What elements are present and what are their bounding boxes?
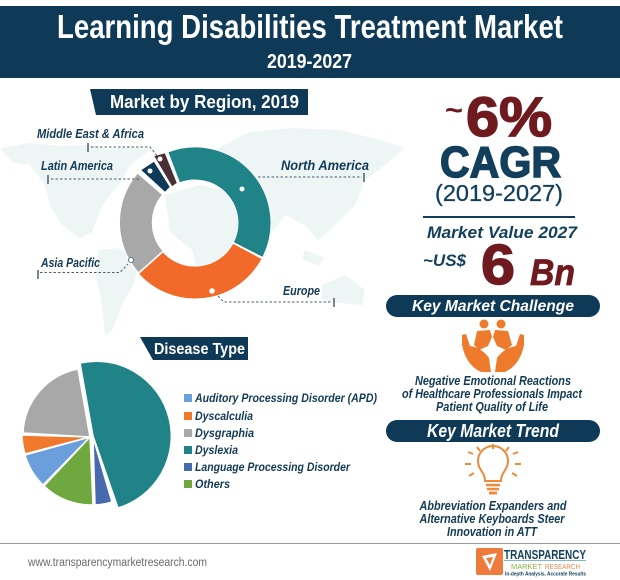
- segment: North America: [168, 147, 271, 258]
- label: North America: [240, 157, 369, 192]
- label: Middle East & Africa: [37, 127, 162, 162]
- segment: Latin America: [141, 162, 170, 192]
- footer url: www.transparencymarketresearch.com: [27, 557, 207, 569]
- header banner: [0, 6, 620, 78]
- slice: Language Processing Disorder: [93, 437, 112, 505]
- donut chart: market by region: [119, 147, 271, 299]
- stat: CAGR: [435, 85, 563, 206]
- stat: CAGR: 6%: [466, 85, 552, 148]
- pill: key market challenge: Key Market Challenge: [412, 298, 574, 315]
- background world map: [0, 128, 405, 335]
- text: challenge description: Patient Quality of Life: [436, 399, 548, 414]
- slice: Dyscalculia: [22, 435, 90, 454]
- text: trend description: Abbreviation Expanders and: [419, 498, 567, 513]
- text: trend description: Innovation in ATT: [447, 524, 538, 539]
- label: Middle East & Africa: Middle East & Africa: [37, 127, 144, 141]
- heading: disease type: [140, 337, 248, 360]
- label: Latin America: Latin America: [41, 159, 113, 173]
- heading: market by region: Market by Region, 2019: [110, 92, 299, 112]
- logo: Transparency Market Research: [476, 547, 586, 578]
- stat: market value: 6: [481, 233, 515, 297]
- legend: disease type: Auditory Processing Disorder (APD): [194, 391, 377, 405]
- subtitle years: 2019-2027: [267, 51, 352, 73]
- stat: CAGR: CAGR: [440, 138, 561, 187]
- logo: Transparency Market Research: TRANSPARENCY: [504, 547, 586, 562]
- label: Asia Pacific: [38, 256, 134, 279]
- logo: Transparency Market Research: In-depth Analysis, Accurate Results: [505, 572, 586, 578]
- heading: disease type: Disease Type: [154, 341, 245, 358]
- heading: market by region: [90, 89, 308, 115]
- stat: market value: [423, 224, 578, 297]
- icon: hands holding people: [462, 320, 524, 372]
- stat: market value: Market Value 2027: [427, 224, 578, 242]
- label: Asia Pacific: Asia Pacific: [40, 256, 100, 270]
- segment: Asia Pacific: [119, 173, 163, 273]
- logo: Transparency Market Research: RESEARCH: [545, 564, 580, 571]
- slice: Auditory Processing Disorder: [25, 437, 90, 485]
- divider: [423, 216, 575, 218]
- pill: key market challenge: [386, 295, 600, 317]
- text: trend description: [419, 498, 567, 539]
- legend: disease type: Dysgraphia: [195, 426, 254, 440]
- text: trend description: Alternative Keyboards Steer: [419, 511, 565, 526]
- icon: light bulb: [465, 444, 521, 493]
- legend: disease type: Others: [195, 477, 230, 491]
- pill: key market trend: Key Market Trend: [427, 421, 560, 441]
- legend: disease type: Language Processing Disorder: [195, 460, 351, 474]
- pill: key market trend: [386, 420, 600, 442]
- legend: disease type: [184, 391, 377, 491]
- label: Europe: [209, 284, 334, 307]
- slice: Others: [44, 437, 93, 505]
- stat: CAGR: ~: [445, 94, 463, 127]
- slice: Dyslexia: [80, 361, 171, 508]
- logo: Transparency Market Research: MARKET: [511, 564, 543, 571]
- text: challenge description: Negative Emotional Reactions: [415, 373, 571, 388]
- stat: CAGR: (2019-2027): [435, 180, 563, 206]
- slice: Dysgraphia: [23, 369, 90, 437]
- text: challenge description: [402, 373, 583, 414]
- label: Europe: Europe: [283, 284, 320, 298]
- stat: market value: Bn: [530, 252, 575, 293]
- text: challenge description: of Healthcare Professionals Impact: [402, 386, 583, 401]
- segment: Europe: [138, 243, 262, 299]
- label: Latin America: [41, 159, 152, 184]
- legend: disease type: Dyscalculia: [195, 409, 253, 423]
- label: North America: North America: [281, 157, 369, 173]
- segment: Middle East and Africa: [154, 153, 177, 186]
- legend: disease type: Dyslexia: [195, 443, 238, 457]
- pie chart: disease type: [22, 361, 171, 508]
- footer divider: [0, 543, 620, 544]
- stat: market value: ~US$: [423, 251, 467, 270]
